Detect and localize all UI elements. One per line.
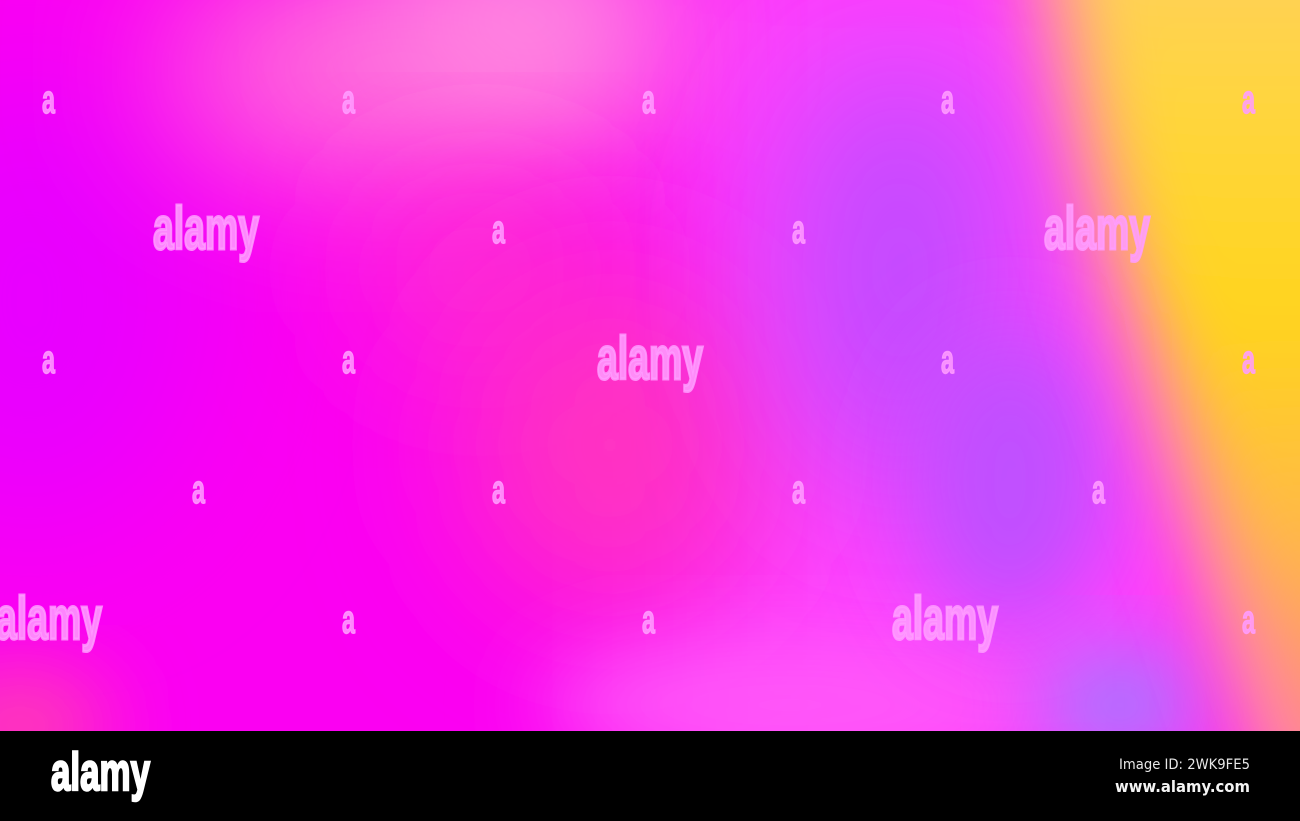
watermark: small a marks: a xyxy=(642,598,655,642)
watermark: small a marks: a xyxy=(792,468,805,512)
watermark: small a marks: a xyxy=(1242,338,1255,382)
watermark: small a marks: a xyxy=(342,598,355,642)
footer logo: alamy xyxy=(51,743,150,802)
watermark: small a marks: a xyxy=(642,78,655,122)
watermark: small a marks: a xyxy=(192,468,205,512)
watermark: small a marks: a xyxy=(1242,78,1255,122)
website: www.alamy.com xyxy=(1115,777,1250,796)
watermark: small a marks: a xyxy=(42,338,55,382)
watermark: small a marks: a xyxy=(342,78,355,122)
watermark: small a marks: a xyxy=(1242,598,1255,642)
watermark: small a marks: a xyxy=(792,208,805,252)
watermark: large alamy logos: alamy xyxy=(0,585,102,652)
watermark: small a marks: a xyxy=(1092,468,1105,512)
watermark: small a marks: a xyxy=(492,208,505,252)
watermark: small a marks: a xyxy=(492,468,505,512)
watermark: large alamy logos xyxy=(0,195,1150,652)
image id: Image ID: 2WK9FE5 xyxy=(1119,757,1250,773)
watermark: small a marks: a xyxy=(941,338,954,382)
watermark: small a marks: a xyxy=(342,338,355,382)
watermark: large alamy logos: alamy xyxy=(892,585,998,652)
watermark: small a marks: a xyxy=(42,78,55,122)
footer bar xyxy=(0,731,1300,821)
watermark: large alamy logos: alamy xyxy=(597,325,703,392)
watermark: large alamy logos: alamy xyxy=(1044,195,1150,262)
watermark: small a marks xyxy=(42,78,1255,642)
watermark: large alamy logos: alamy xyxy=(153,195,259,262)
watermark: small a marks: a xyxy=(941,78,954,122)
